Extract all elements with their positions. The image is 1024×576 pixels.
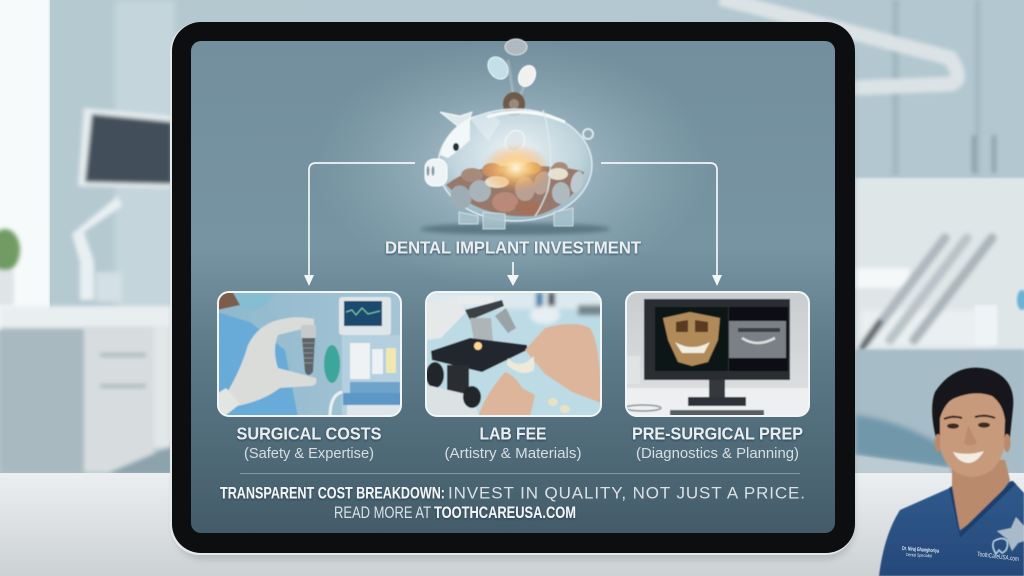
piggy shadow (420, 223, 610, 235)
footer text: TOOTHCAREUSA.COM (434, 503, 576, 522)
skull scan (663, 312, 720, 366)
coins pile (446, 166, 584, 216)
caption: surgical costs: (Safety & Expertise) (244, 445, 374, 462)
main heading: DENTAL IMPLANT INVESTMENT (385, 238, 641, 258)
dentist portrait (879, 368, 1024, 576)
smile (953, 451, 984, 463)
caption: pre-surgical prep: PRE-SURGICAL PREP (632, 424, 803, 444)
scrubs (879, 481, 1024, 576)
rib line (535, 110, 551, 216)
caption: lab fee: (Artistry & Materials) (444, 445, 582, 462)
surgeon gown (217, 312, 298, 417)
anesthesia bag (324, 345, 340, 383)
denture (507, 356, 534, 373)
scrub text: Dr. Niraj Ghanghoriya (902, 546, 940, 555)
connector arrows (304, 163, 722, 286)
left arrow (304, 163, 415, 286)
blurred monitor (72, 108, 172, 302)
center arrow (507, 262, 519, 286)
ears (934, 434, 942, 452)
footer text: TRANSPARENT COST BREAKDOWN: (220, 484, 445, 502)
caption: lab fee (444, 424, 582, 462)
tablet screen (191, 41, 835, 533)
hair back (932, 368, 1013, 446)
tablet (170, 22, 855, 560)
loose teeth (548, 398, 558, 406)
machine (342, 335, 402, 417)
gloved hand (226, 317, 316, 407)
pig tail (583, 129, 593, 139)
caption: pre-surgical prep (632, 424, 803, 462)
blurred dental unit (855, 178, 1024, 350)
blurred plant (0, 229, 20, 306)
right cabinet lines (892, 0, 996, 175)
nose (964, 425, 977, 446)
glow (482, 144, 550, 192)
caption: surgical costs (236, 424, 382, 462)
eyes (947, 423, 959, 429)
face (940, 393, 1005, 477)
dental lamp arm (720, 0, 958, 88)
panoramic x-ray (729, 321, 786, 358)
footer text: INVEST IN QUALITY, NOT JUST A PRICE. (448, 484, 805, 502)
hands (525, 324, 601, 403)
dentist portrait: Dental Specialist (906, 552, 933, 558)
coin in belly (502, 127, 528, 155)
feet (459, 208, 573, 229)
coat badge (997, 517, 1024, 551)
falling coins (484, 39, 539, 116)
implant (301, 325, 316, 338)
panel: pre-surgical prep photo (625, 291, 810, 417)
right arrow (601, 163, 722, 286)
caption: surgical costs: SURGICAL COSTS (236, 424, 382, 444)
left window glow (0, 0, 50, 330)
pig body (425, 109, 593, 229)
microscope (427, 296, 466, 340)
caption: pre-surgical prep: (Diagnostics & Planning) (636, 445, 799, 462)
footer text: READ MORE AT (334, 503, 431, 522)
tooth logo (993, 538, 1007, 554)
neck (952, 460, 1010, 530)
panel: surgical costs photo (217, 291, 403, 417)
blurred lab items (425, 291, 603, 324)
surgeon mask (234, 293, 275, 310)
table surface (0, 473, 1024, 576)
panel: lab fee photo (425, 291, 603, 417)
blurred desk (0, 306, 172, 474)
caption: lab fee: LAB FEE (480, 424, 546, 444)
pig face (440, 118, 470, 158)
footer text (220, 484, 805, 522)
piggy bank illustration (312, 39, 712, 290)
monitor (339, 297, 391, 335)
monitor (644, 299, 790, 380)
